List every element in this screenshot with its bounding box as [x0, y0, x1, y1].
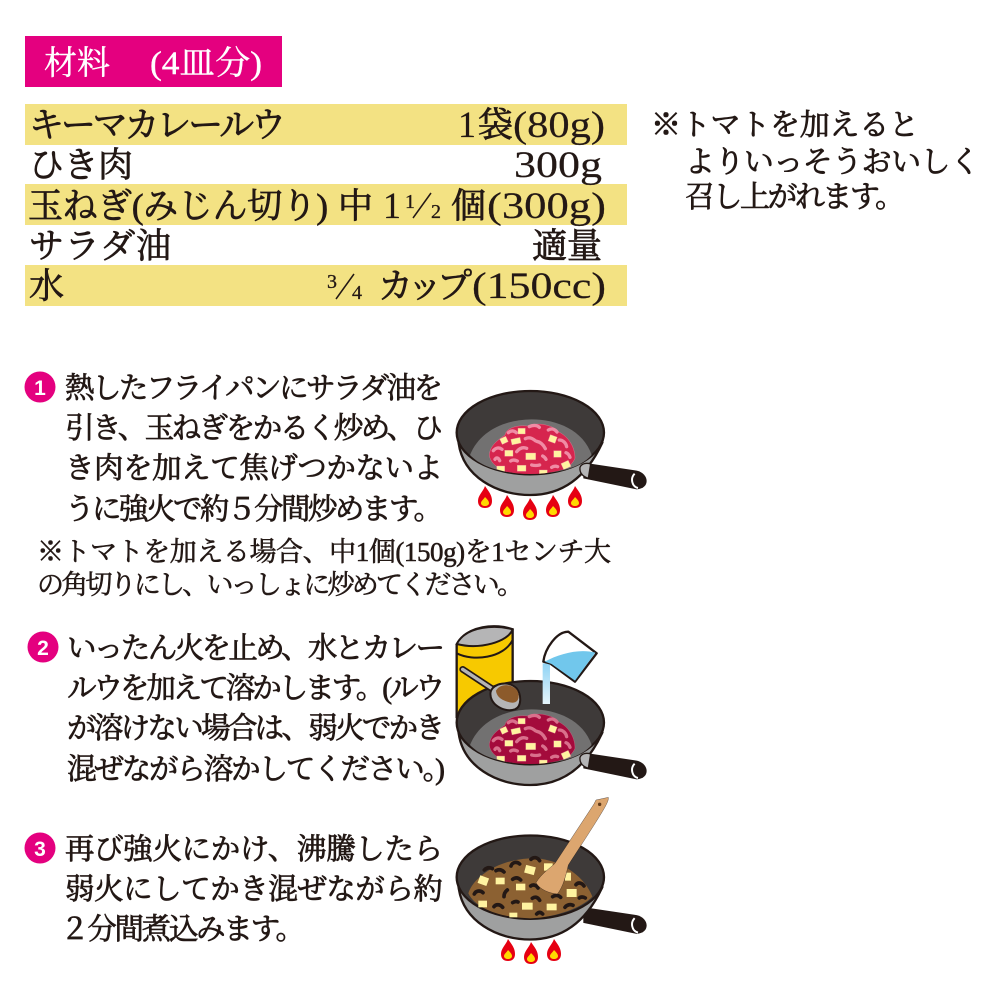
- step 1 note: [37, 537, 611, 600]
- step 3 text: 3: [34, 838, 46, 861]
- step 1 note: ※トマトを加える場合、中1個(150g)を1センチ大: [37, 537, 611, 567]
- illustration: roux package, spoon, water cup and pan: [457, 626, 647, 785]
- step 1 text: き肉を加えて焦げつかないよ: [65, 452, 443, 485]
- ingredients table: ひき肉: [29, 146, 133, 185]
- side note: tomato: よりいっそうおいしく: [685, 146, 980, 179]
- step 2 text: [28, 632, 445, 786]
- step 3 text: 再び強火にかけ、沸騰したら: [65, 833, 443, 866]
- side note: tomato: 召し上がれます。: [685, 181, 905, 214]
- ingredients table: (80g): [513, 105, 605, 146]
- step 1 text: うに強火で約５分間炒めます。: [65, 493, 443, 526]
- ingredients table: 玉ねぎ(みじん切り): [28, 187, 328, 226]
- ingredients table: 1: [405, 191, 415, 213]
- step 3 text: [24, 832, 443, 946]
- ingredients table: 中: [338, 187, 373, 226]
- illustration: pan with simmering curry and spatula: [457, 797, 647, 964]
- ingredients table: 2: [431, 201, 441, 223]
- ingredients table: 1: [458, 105, 476, 146]
- side note: tomato: [651, 109, 980, 214]
- step 1 text: 熱したフライパンにサラダ油を: [65, 372, 443, 405]
- ingredients table: (150cc): [472, 266, 606, 307]
- step 1 note: の角切りにし、いっしょに炒めてください。: [37, 570, 524, 600]
- ingredients table: サラダ油: [29, 227, 171, 266]
- ingredients table: 袋: [478, 106, 513, 145]
- heading: materials: [25, 36, 282, 87]
- step 2 text: いったん火を止め、水とカレー: [67, 632, 445, 665]
- ingredients table: 水: [29, 267, 64, 306]
- step 2 text: が溶けない場合は、弱火でかき: [67, 712, 445, 745]
- side note: tomato: ※トマトを加えると: [651, 109, 919, 142]
- ingredients table: 個: [451, 187, 486, 226]
- ingredients table: [25, 104, 627, 307]
- step 3 text: ２分間煮込みます。: [60, 913, 305, 946]
- ingredients table: 300g: [514, 145, 602, 186]
- step 1 text: [24, 372, 443, 526]
- step 1 text: 1: [34, 377, 46, 400]
- step 3 text: 弱火にしてかき混ぜながら約: [65, 873, 443, 906]
- heading: materials: (4皿分): [150, 45, 262, 82]
- ingredients table: (300g): [487, 186, 606, 227]
- ingredients table: 1: [383, 186, 401, 227]
- illustration: pan with meat and onion over flame: [457, 391, 647, 520]
- step 2 text: ルウを加えて溶かします。(ルウ: [67, 672, 445, 705]
- ingredients table: 3: [327, 271, 337, 293]
- ingredients table: 4: [352, 282, 362, 304]
- heading: materials: 材料: [44, 45, 110, 82]
- step 2 text: 混ぜながら溶かしてください。): [67, 753, 445, 786]
- ingredients table: 適量: [532, 227, 602, 266]
- ingredients table: カップ: [378, 267, 472, 306]
- step 2 text: 2: [37, 637, 49, 660]
- step 1 text: 引き、玉ねぎをかるく炒め、ひ: [65, 412, 443, 445]
- ingredients table: キーマカレールウ: [29, 106, 286, 145]
